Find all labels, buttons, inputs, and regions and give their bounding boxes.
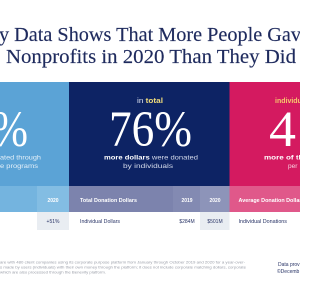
centre table row: $501M	[207, 219, 223, 225]
centre kicker: in total	[137, 98, 163, 105]
right table row: Individual Donations	[238, 219, 288, 225]
centre table row: $284M	[179, 219, 195, 225]
centre table row: Individual Dollars	[80, 219, 121, 225]
centre table header: Total Donation Dollars	[80, 198, 137, 204]
centre description: by individuals	[123, 163, 174, 170]
right description	[264, 154, 308, 170]
table: right	[230, 186, 305, 225]
right table header: Average Donation Dollars	[238, 198, 300, 204]
data credit	[277, 262, 300, 275]
centre big number: 76%	[109, 102, 192, 158]
data credit: ©Decemb	[277, 268, 300, 275]
footnote: s made by users (individuals) with their own money through the platform; it does not include corporate matching dollars, corporate	[0, 264, 246, 270]
centre table header: 2020	[209, 198, 221, 204]
right description: more of the	[264, 154, 300, 162]
centre description	[104, 154, 198, 170]
left table change value: +51%	[47, 219, 60, 225]
right description: per	[288, 163, 298, 170]
panel: left blue	[0, 82, 69, 186]
centre table header	[80, 198, 221, 204]
footnote: which are also processed through the Benevity platform.	[0, 270, 106, 274]
centre table header: 2019	[181, 198, 193, 204]
table: left	[0, 186, 69, 230]
centre table row	[80, 219, 223, 225]
title: y Data Shows That More People Gav	[0, 24, 300, 46]
left description: ated through	[0, 154, 41, 162]
left table 2020 header: 2020	[47, 198, 59, 204]
title	[0, 24, 302, 68]
title: Nonprofits in 2020 Than They Did	[6, 46, 296, 68]
centre description: more dollars were donated	[104, 154, 198, 162]
left description: e programs	[0, 163, 39, 170]
footnote	[0, 260, 246, 274]
footnote: are with 480 client companies using its corporate purpose platform from January through October 2019 and 2020 for a year-over-	[0, 260, 246, 264]
panel: centre navy	[69, 82, 230, 186]
table: centre	[69, 186, 230, 230]
panel: right pink	[230, 82, 320, 186]
data credit: Data prov	[278, 262, 300, 268]
left description	[0, 154, 41, 170]
